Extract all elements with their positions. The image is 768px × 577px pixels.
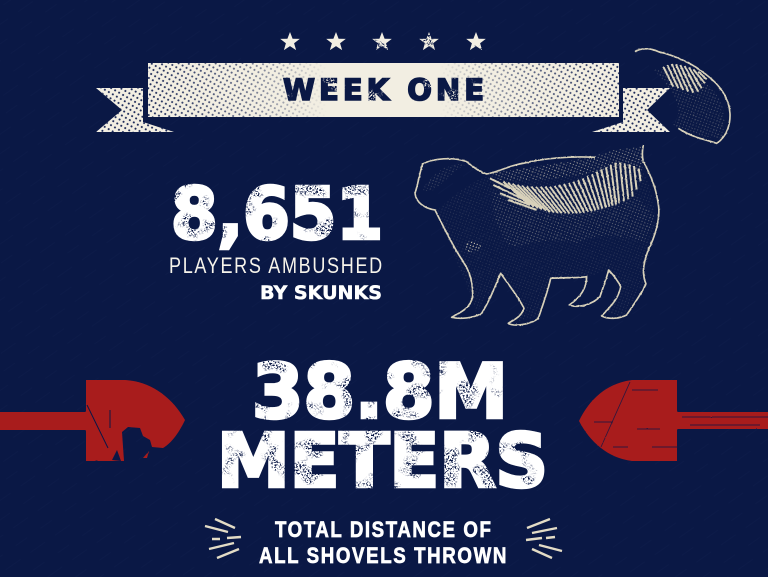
row of five stars	[280, 32, 486, 50]
ribbon banner	[96, 63, 670, 132]
number: 38.8M: 38.8M	[252, 348, 508, 436]
stat: 38.8m meters	[217, 348, 548, 504]
word: meters: METERS	[217, 418, 548, 504]
icon: left shovel	[0, 380, 185, 461]
ribbon left fold	[96, 88, 174, 132]
icon: right spark lines	[526, 519, 562, 558]
label: players ambushed: PLAYERS AMBUSHED	[169, 254, 382, 278]
label: by skunks: BY SKUNKS	[260, 282, 382, 304]
caption: total distance of all shovels thrown: TOTAL DISTANCE OF	[275, 519, 491, 542]
number: 8,651: 8,651	[171, 172, 383, 256]
ribbon right fold	[592, 88, 670, 132]
caption: total distance of all shovels thrown: ALL SHOVELS THROWN	[259, 545, 506, 568]
icon: skunk tail	[635, 49, 730, 143]
icon: left spark lines	[205, 519, 241, 558]
stat: 8,651 players ambushed by skunks	[169, 172, 383, 304]
caption: total distance of all shovels thrown	[259, 519, 506, 568]
ribbon main band	[148, 63, 619, 117]
icon: right shovel	[579, 380, 768, 461]
heading: week one: WEEK ONE	[283, 73, 484, 107]
icon: skunk body	[415, 145, 659, 325]
